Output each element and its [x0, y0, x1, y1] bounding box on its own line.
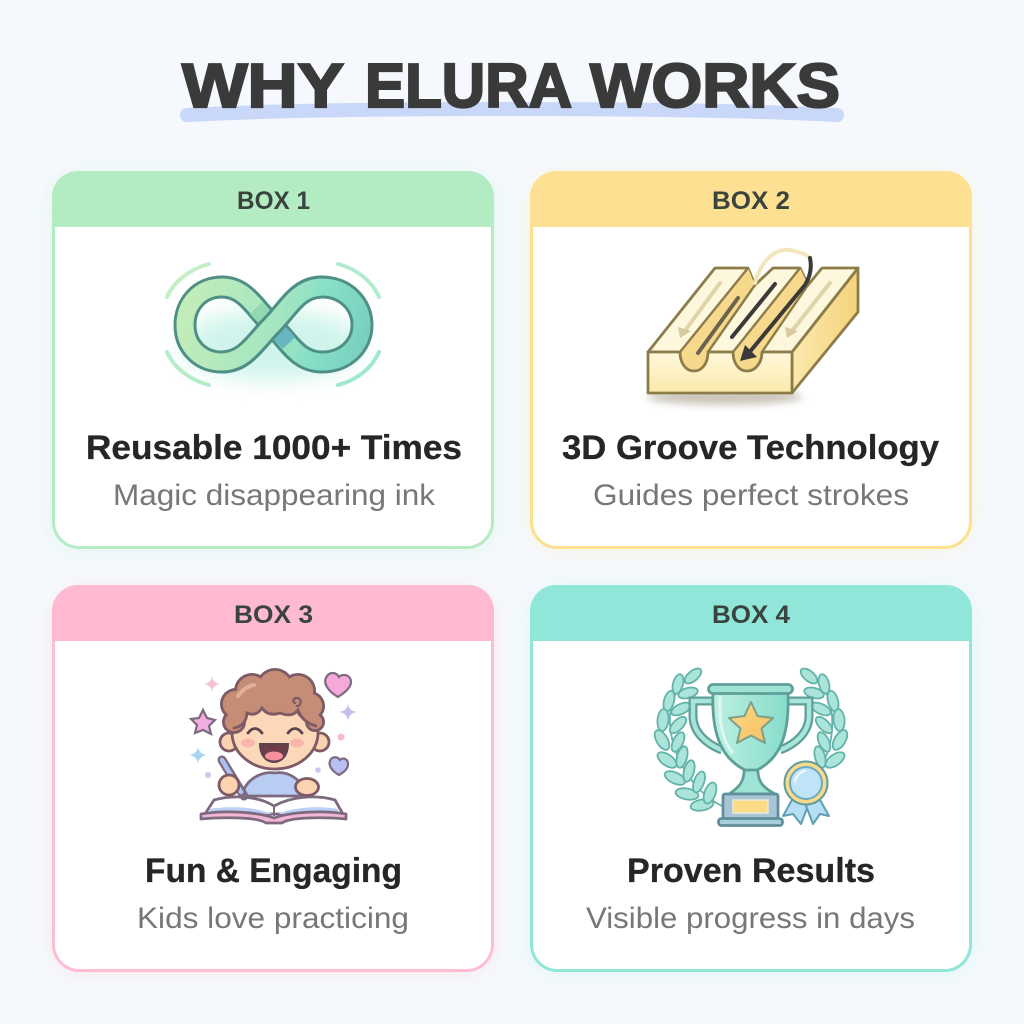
- icon: trophy with laurel and ribbon: [652, 666, 850, 826]
- trophy base: [723, 794, 778, 819]
- box 1 header: [52, 171, 494, 227]
- hands and pencil: [222, 760, 244, 796]
- box 1 heading: Reusable 1000+ Times: [86, 429, 462, 467]
- panel: box 3: [52, 585, 494, 972]
- panel: box 1: [52, 171, 494, 548]
- box 3 header: [52, 585, 494, 641]
- box 3 label: BOX 3: [234, 601, 313, 629]
- trophy handles: [693, 701, 722, 750]
- icon: happy child with book: [189, 668, 357, 823]
- box 2 label: BOX 2: [712, 187, 790, 215]
- open book: [205, 797, 343, 814]
- box 2 heading: 3D Groove Technology: [562, 429, 939, 467]
- box 3 subtext: Kids love practicing: [137, 902, 409, 935]
- decorations: [204, 676, 220, 692]
- box 2 header: [530, 171, 972, 227]
- title word: WORKS: WORKS: [590, 52, 840, 121]
- icon: 3D groove block: [647, 250, 858, 405]
- box 2 subtext: Guides perfect strokes: [593, 479, 909, 512]
- icon: infinity loop: [167, 264, 379, 385]
- ribbon: [783, 798, 809, 824]
- box 4 heading: Proven Results: [627, 852, 875, 890]
- cheeks: [241, 738, 255, 748]
- trophy plate: [733, 800, 768, 813]
- title word: ELURA: ELURA: [365, 52, 572, 121]
- hair: [220, 668, 325, 734]
- box 4 label: BOX 4: [712, 601, 790, 629]
- title underline: [187, 109, 837, 115]
- shoulders: [242, 773, 305, 796]
- face: [232, 697, 318, 769]
- title word: WHY: WHY: [182, 52, 344, 121]
- trophy star: [729, 702, 773, 743]
- right laurel: [798, 666, 850, 790]
- panel: box 4: [530, 585, 972, 972]
- title: [182, 52, 840, 121]
- box 1 subtext: Magic disappearing ink: [113, 479, 436, 512]
- box 3 heading: Fun & Engaging: [145, 852, 402, 890]
- trophy rim: [708, 684, 792, 694]
- mouth: [260, 744, 288, 762]
- box 1 label: BOX 1: [237, 187, 310, 215]
- panel: box 2: [530, 171, 972, 548]
- eyes: [248, 728, 302, 733]
- box 4 header: [530, 585, 972, 641]
- trophy stem: [729, 768, 775, 794]
- box 4 subtext: Visible progress in days: [586, 902, 915, 935]
- ears: [220, 733, 238, 751]
- trophy cup: [713, 692, 788, 770]
- left laurel: [652, 666, 722, 812]
